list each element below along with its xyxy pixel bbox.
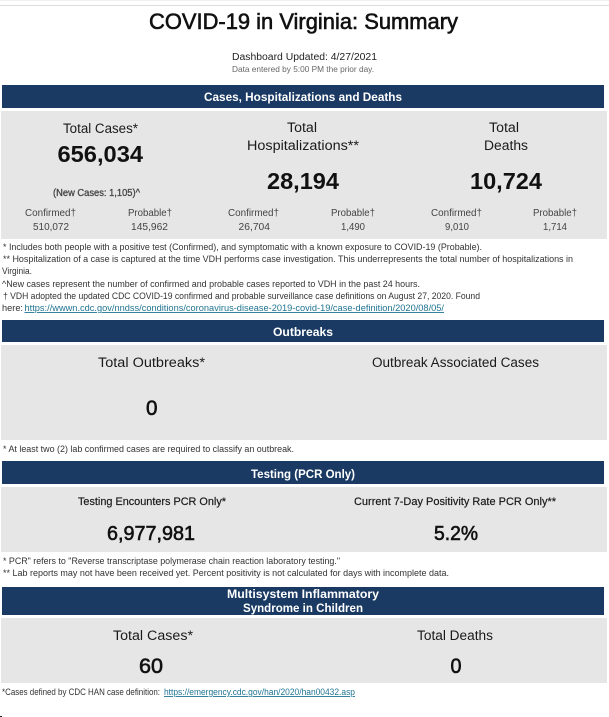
total deaths stat: Probable†: [533, 208, 577, 219]
MIS-C total cases stat: [113, 628, 194, 678]
positivity rate stat: [354, 496, 557, 545]
footnote: MIS-C: *Cases defined by CDC HAN case definition:: [2, 687, 160, 697]
total hospitalizations stat: [228, 120, 375, 233]
outbreak associated cases label: Outbreak Associated Cases: [372, 355, 539, 370]
total hospitalizations stat: 26,704: [238, 222, 271, 233]
total hospitalizations stat: Total: [287, 120, 317, 135]
total deaths stat: 9,010: [445, 222, 470, 233]
dashboard update info: Dashboard Updated: 4/27/2021: [232, 52, 377, 63]
positivity rate stat: Current 7-Day Positivity Rate PCR Only**: [354, 496, 557, 508]
total hospitalizations stat: 1,490: [341, 222, 366, 233]
footnotes: testing: ** Lab reports may not have been received yet. Percent positivity is not calculated for days with incomplete data.: [3, 568, 449, 578]
total cases stat: Total Cases*: [63, 121, 139, 136]
title: COVID-19 in Virginia: Summary: [149, 9, 458, 34]
footnotes: cases: * Includes both people with a positive test (Confirmed), and symptomatic with a known exposure to COVID-19 (Probable).: [3, 242, 482, 252]
total hospitalizations stat: Hospitalizations**: [247, 138, 360, 153]
testing encounters stat: [78, 496, 227, 545]
MIS-C total deaths stat: [417, 628, 493, 678]
panel: outbreaks: [1, 345, 607, 440]
dashboard update info: Data entered by 5:00 PM the prior day.: [232, 65, 374, 74]
total hospitalizations stat: 28,194: [267, 168, 339, 194]
total outbreaks stat: [98, 355, 206, 420]
positivity rate stat: 5.2%: [434, 523, 478, 545]
total deaths stat: Total: [489, 120, 519, 135]
dashboard update info: [232, 52, 377, 74]
MIS-C total cases stat: 60: [139, 655, 163, 678]
footnotes: cases: † VDH adopted the updated CDC COVID-19 confirmed and probable surveillance case definitions on August 27, 2020. Found: [3, 291, 480, 301]
total deaths stat: Deaths: [484, 138, 528, 153]
footnotes: cases: https://wwwn.cdc.gov/nndss/conditions/coronavirus-disease-2019-covid-19/case-definition/2020/08/05/: [24, 303, 445, 313]
MIS-C total deaths stat: 0: [450, 655, 462, 678]
total hospitalizations stat: Confirmed†: [228, 208, 279, 219]
footnotes: cases: here:: [2, 303, 23, 313]
footnote: MIS-C: [2, 687, 355, 697]
panel: MIS-C: [1, 618, 607, 683]
total cases stat: [25, 121, 172, 233]
total cases stat: 656,034: [58, 141, 143, 167]
total outbreaks stat: 0: [146, 397, 158, 420]
section header: MIS-C: Multisystem Inflammatory: [227, 587, 379, 601]
total deaths stat: [431, 120, 577, 233]
section header: outbreaks: [2, 320, 604, 342]
total cases stat: Probable†: [128, 208, 172, 219]
total cases stat: 510,072: [33, 222, 69, 233]
panel: testing: [1, 487, 607, 552]
section header: testing: Testing (PCR Only): [251, 467, 355, 481]
footnotes: testing: [3, 556, 449, 578]
MIS-C total cases stat: Total Cases*: [113, 628, 194, 643]
footnote: MIS-C: https://emergency.cdc.gov/han/2020/han00432.asp: [164, 687, 355, 697]
total cases stat: 145,962: [131, 222, 168, 233]
MIS-C total deaths stat: Total Deaths: [417, 628, 493, 643]
panel: cases, hospitalizations and deaths: [1, 111, 607, 239]
footnotes: cases: ** Hospitalization of a case is captured at the time VDH performs case investigation. This underrepresents the total number of hospitalizations in: [3, 254, 573, 264]
footnotes: cases: Virginia.: [2, 266, 32, 276]
section header: MIS-C: Syndrome in Children: [243, 601, 363, 615]
total cases stat: Confirmed†: [25, 208, 76, 219]
total hospitalizations stat: Probable†: [331, 208, 375, 219]
footnotes: cases: [2, 242, 573, 313]
footnote: outbreaks: * At least two (2) lab confirmed cases are required to classify an outbreak.: [3, 444, 294, 454]
testing encounters stat: Testing Encounters PCR Only*: [78, 496, 227, 508]
section header: cases: [2, 85, 604, 108]
total outbreaks stat: Total Outbreaks*: [98, 355, 206, 370]
footnotes: cases: ^New cases represent the number of confirmed and probable cases reported to VDH in the past 24 hours.: [2, 279, 420, 289]
section header: cases: Cases, Hospitalizations and Deaths: [204, 90, 402, 104]
total deaths stat: 10,724: [470, 168, 542, 194]
total deaths stat: Confirmed†: [431, 208, 482, 219]
section header: MIS-C: [2, 587, 604, 615]
section header: testing: [2, 461, 604, 484]
section header: outbreaks: Outbreaks: [273, 325, 333, 339]
footnotes: testing: * PCR" refers to "Reverse transcriptase polymerase chain reaction laboratory testing.": [3, 556, 340, 566]
total deaths stat: 1,714: [543, 222, 568, 233]
testing encounters stat: 6,977,981: [107, 523, 195, 545]
total cases stat: (New Cases: 1,105)^: [53, 188, 140, 199]
